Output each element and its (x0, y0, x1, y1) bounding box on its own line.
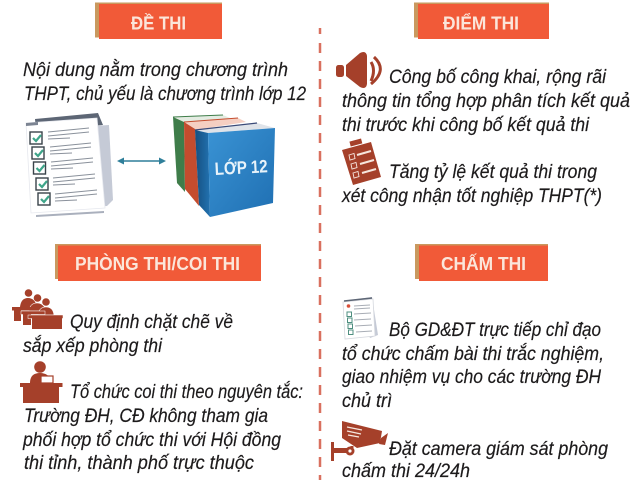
text block: pass rate: Tăng tỷ lệ kết quả thi trong (389, 161, 597, 183)
heading: Phòng thi / Coi thi: PHÒNG THI/COI THI (75, 253, 240, 274)
text block: seating rules (23, 311, 233, 357)
arrow: double-headed (117, 158, 166, 164)
text block: ministry directs grading: Bộ GD&ĐT trực tiếp chỉ đạo (389, 319, 601, 341)
text block: ministry directs grading: chủ trì (342, 390, 392, 412)
text block: invigilation principle: Trường ĐH, CĐ không tham gia (24, 405, 268, 427)
icon: loudspeaker (336, 52, 380, 88)
text block: ministry directs grading (342, 319, 604, 412)
heading: Đề thi: ĐỀ THI (131, 12, 186, 34)
icon: test papers with checklist (26, 113, 113, 217)
text block: seating rules: Quy định chặt chẽ về (70, 311, 233, 333)
text block: pass rate (341, 161, 602, 207)
text block: ministry directs grading: giao nhiệm vụ cho các trường ĐH (342, 366, 602, 388)
icon: invigilator at desk (20, 361, 62, 403)
text block: publish results: Công bố công khai, rộng rãi (389, 66, 607, 88)
text block: exam content: THPT, chủ yếu là chương trình lớp 12 (24, 83, 306, 105)
text block: camera monitoring: Đặt camera giám sát phòng (389, 438, 608, 460)
text block: invigilation principle (22, 380, 303, 474)
text block: pass rate: xét công nhận tốt nghiệp THPT(*) (341, 185, 602, 207)
heading: Điểm thi (414, 2, 549, 39)
text block: invigilation principle: thi tỉnh, thành phố trực thuộc (24, 452, 254, 474)
text block: publish results: thi trước khi công bố kết quả thi (342, 114, 590, 136)
heading: Phòng thi / Coi thi (55, 244, 261, 281)
icon: security camera (331, 421, 388, 461)
text block: exam content (23, 58, 306, 105)
text block: seating rules: sắp xếp phòng thi (23, 334, 163, 357)
icon: marked test sheet (343, 297, 378, 339)
icon: stack of books, Lớp 12 (173, 115, 275, 217)
icon: stack of books, Lớp 12: LỚP 12 (214, 155, 268, 179)
text block: exam content: Nội dung nằm trong chương trình (23, 58, 288, 81)
icon: exam room desks (12, 289, 63, 329)
text block: ministry directs grading: tổ chức chấm bài thi trắc nghiệm, (342, 342, 604, 365)
text block: invigilation principle: Tổ chức coi thi theo nguyên tắc: (70, 380, 303, 403)
text block: invigilation principle: phối hợp tổ chức thi với Hội đồng (22, 429, 281, 451)
checkboxes (30, 132, 50, 205)
text block: camera monitoring (342, 438, 608, 480)
heading: Chấm thi (415, 244, 548, 281)
heading: Điểm thi: ĐIỂM THI (443, 12, 519, 34)
heading: Đề thi (95, 2, 222, 39)
text block: publish results (342, 66, 630, 136)
icon: clipboard (342, 139, 381, 185)
heading: Chấm thi: CHẤM THI (441, 253, 526, 274)
